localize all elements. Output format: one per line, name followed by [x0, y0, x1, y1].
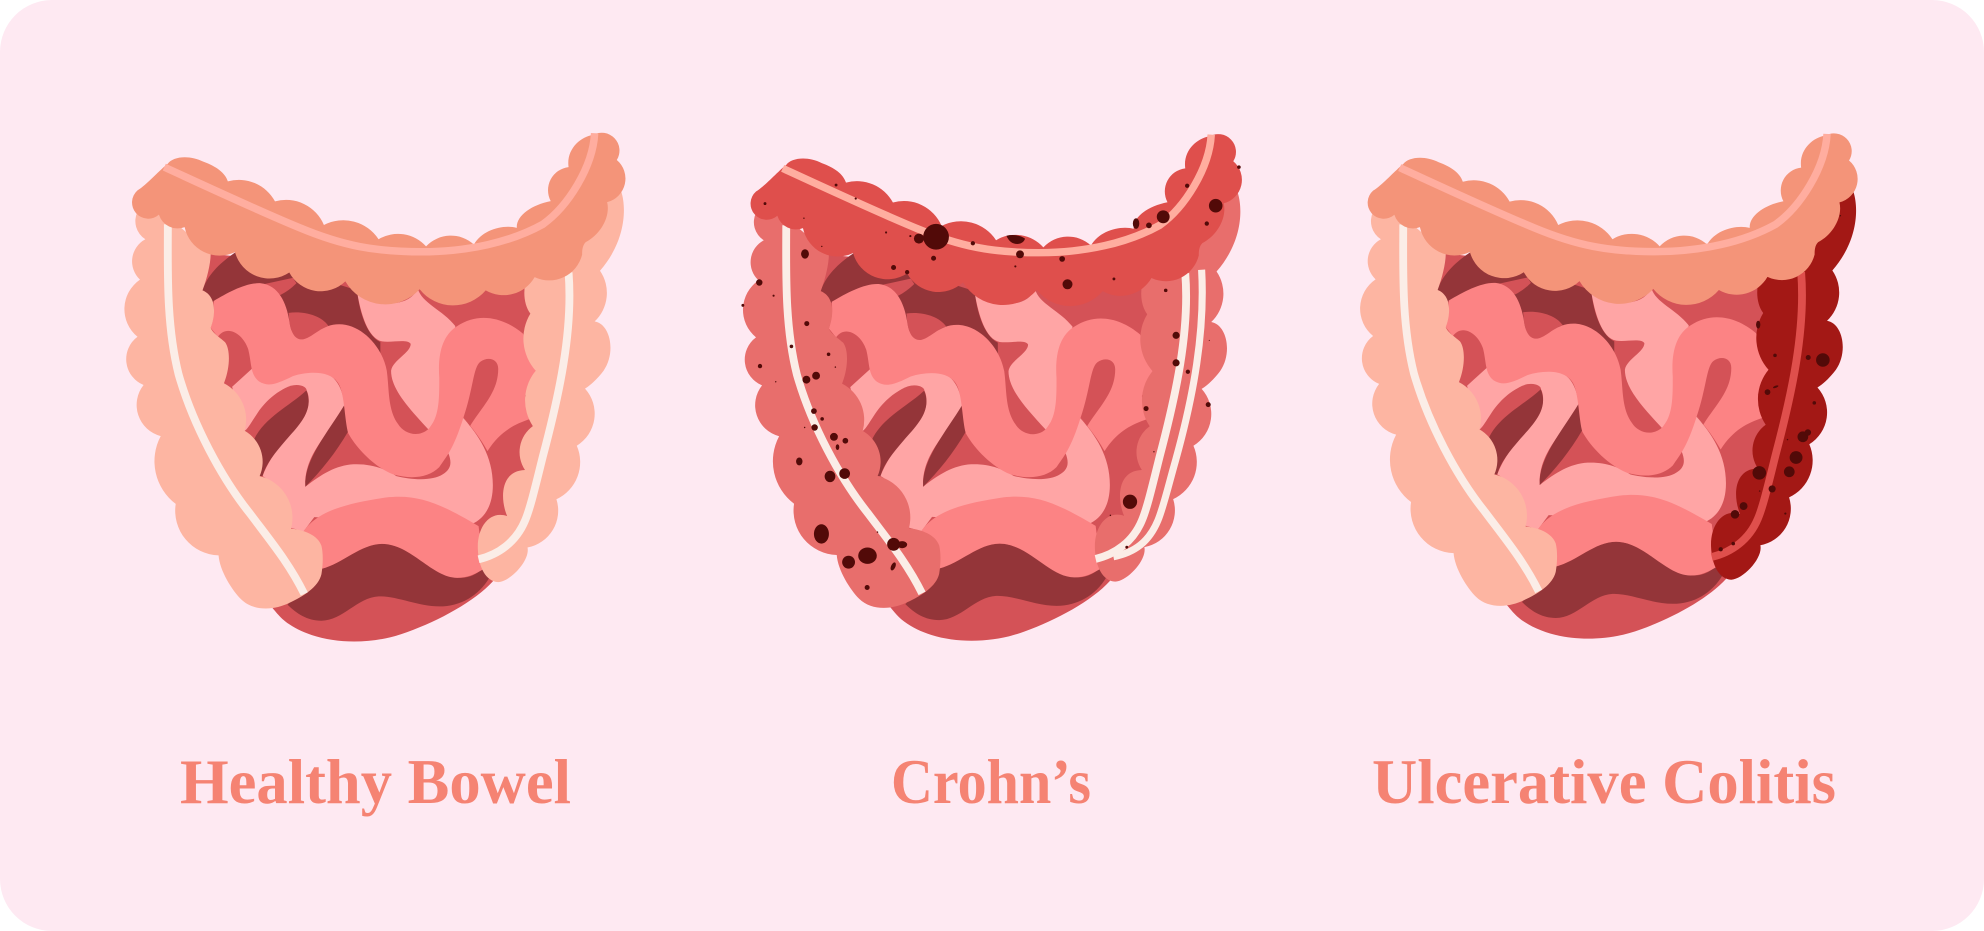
- heading: Crohn's: Crohn’s: [891, 746, 1091, 817]
- ulcers: Crohn's: [741, 165, 1241, 590]
- illustration: Crohn's: [741, 134, 1242, 641]
- heading: Healthy Bowel: Healthy Bowel: [180, 746, 571, 817]
- illustration: healthy bowel: [124, 133, 625, 642]
- heading: Ulcerative Colitis: Ulcerative Colitis: [1372, 746, 1836, 817]
- ulcers: ulcerative colitis: [1719, 215, 1841, 551]
- illustration: ulcerative colitis: [1360, 133, 1858, 639]
